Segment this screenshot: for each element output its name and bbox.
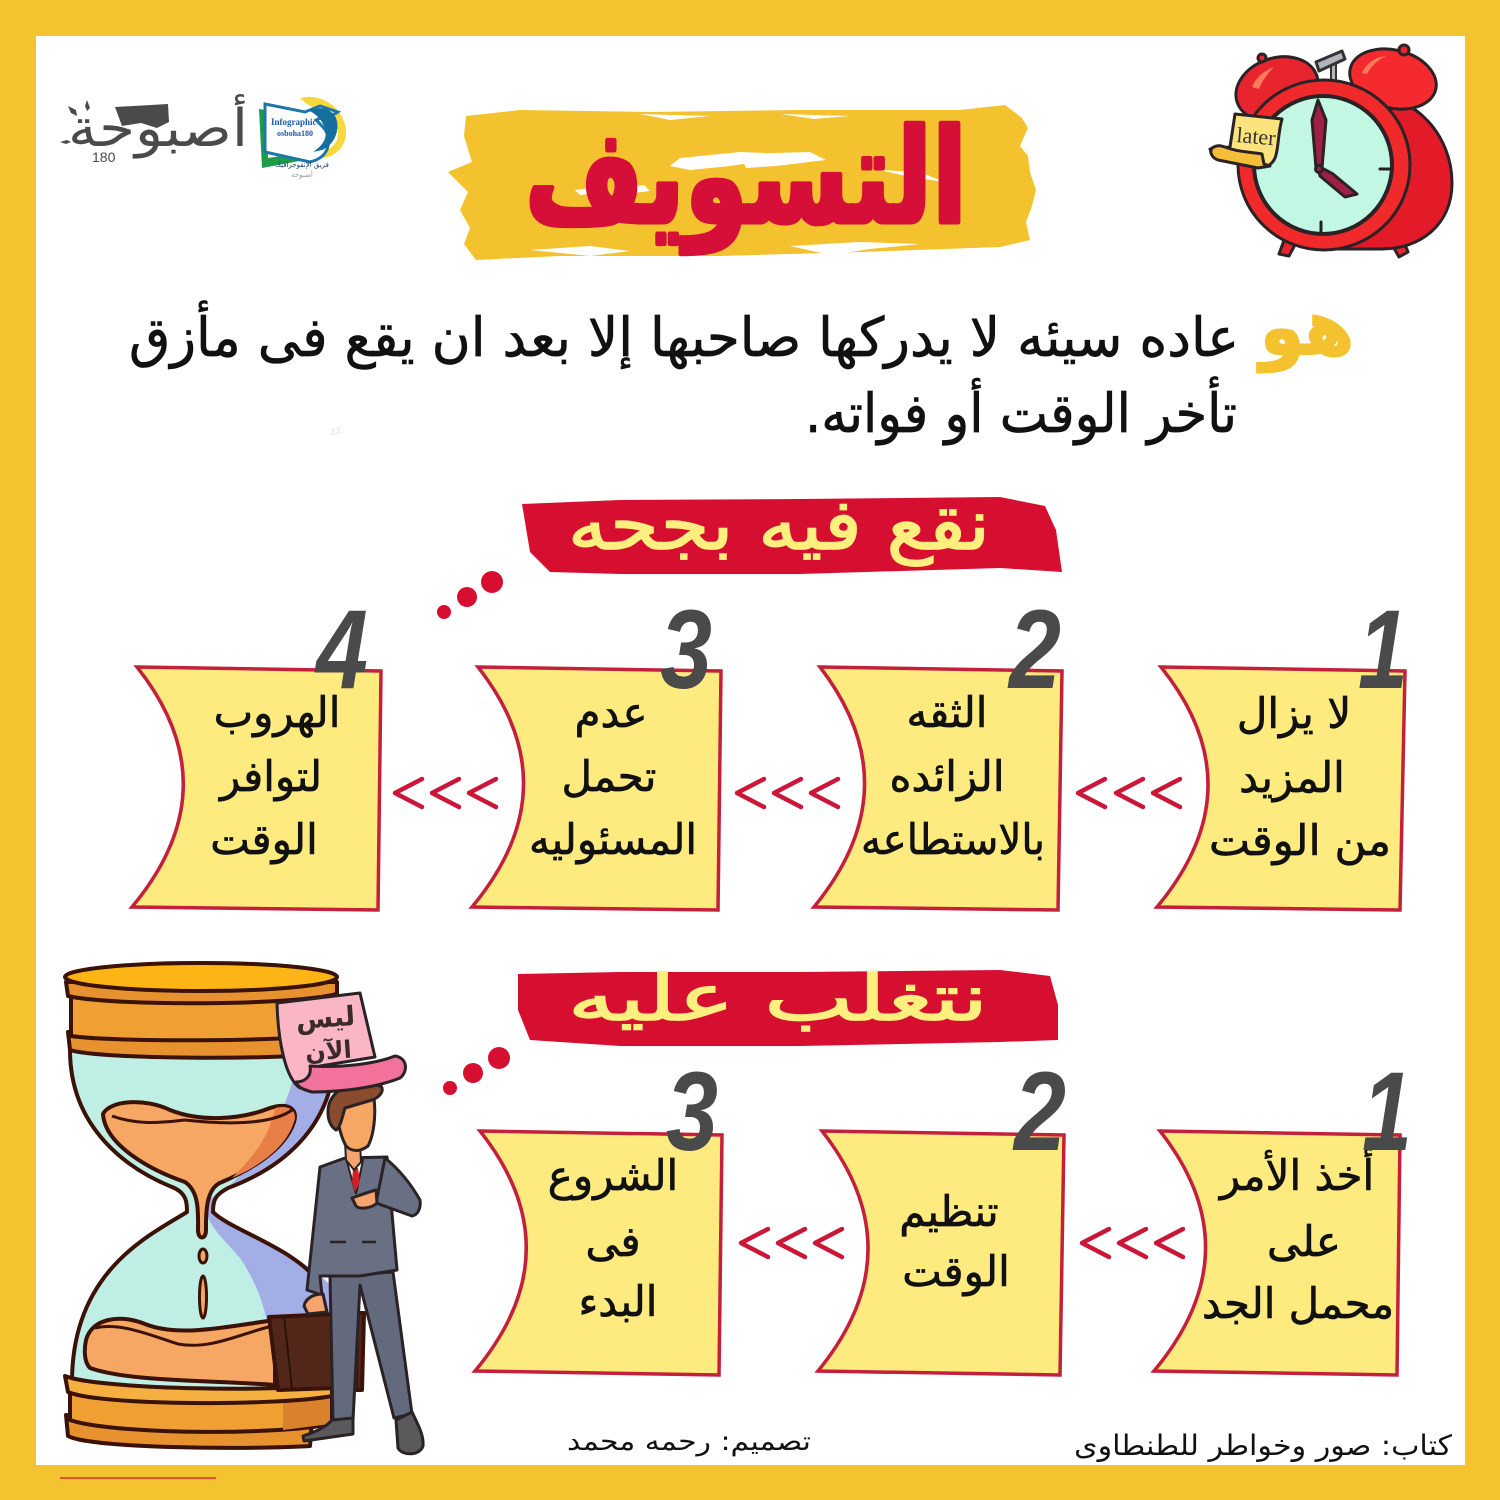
credit: designer: تصميم: رحمه محمد [567,1427,811,1457]
man shoes [303,1412,423,1454]
step 2 row 2: تنظيم [899,1187,999,1237]
intro text: highlighted word: هو [1256,283,1354,373]
glass outline [70,1050,335,1380]
hourglass top cap [65,963,337,1058]
arrow 2-3 row 1 [737,779,838,807]
briefcase [269,1313,364,1390]
step 3 row 1 [472,587,721,910]
clock red ring [1238,80,1410,250]
logo number: 180 [92,149,116,165]
step 2 row 1: الزائده [889,752,1005,801]
step 3 row 2: الشروع [548,1151,678,1200]
sticky note: later: later [1236,122,1277,150]
hourglass glass [70,1050,335,1395]
step 1 row 1: المزيد [1239,753,1345,802]
step 3 row 1: تحمل [562,752,656,801]
step 4 row 1 [132,587,381,910]
man legs [330,1272,412,1420]
arrow 2-3 row 2 [741,1229,842,1257]
arrow 1-2 row 1 [1078,779,1180,807]
logo wordmark: أصبوحة [68,94,248,159]
arrow 1-2 row 2 [1082,1229,1183,1257]
section heading 1: نقع فيه بجحه [568,484,990,566]
step 3 row 2: البدء [579,1277,657,1326]
step 1 row 1: لا يزال [1237,689,1351,738]
step 2 row 1 [814,587,1062,910]
team emblem: أصبوحة [291,170,313,179]
title: التسويف [525,101,967,254]
step 1 row 2: محمل الجد [1202,1279,1394,1328]
step 2 row 1: 2 [1007,587,1061,712]
credit: book source: كتاب: صور وخواطر للطنطاوى [1074,1429,1453,1462]
clock back body [1320,95,1452,249]
step 1 row 1: 1 [1358,587,1408,712]
clock right bell [1343,40,1443,118]
glass shadow [207,1050,335,1345]
intro text: line 1: عاده سيئه لا يدركها صاحبها إلا بعد ان يقع فى مأزق [129,300,1239,370]
banner paint scratches [530,114,944,256]
clock minute hand [1312,100,1326,168]
clock left bell [1227,47,1327,131]
sticky note: later [1210,114,1282,168]
falling drops [199,1249,207,1318]
step 3 row 1: 3 [660,587,712,712]
step 3 row 2: 3 [666,1049,718,1174]
section ribbon 1 [522,484,1062,574]
section heading 2: نتغلب عليه [568,962,988,1036]
step 1 row 2: على [1267,1217,1341,1266]
clock pin [1316,166,1322,172]
step 3 row 2: فى [585,1217,641,1266]
logo graduation cap [115,104,169,128]
man neck [345,1142,361,1170]
logo: osboha 180 [60,94,346,179]
step 2 row 2: الوقت [902,1247,1010,1296]
step 4 row 1: الوقت [210,815,318,864]
hourglass bottom base [65,1376,332,1448]
step 2 row 2: 2 [1012,1049,1066,1174]
clock hour hand [1318,166,1357,197]
step 2 row 2 [818,1049,1066,1375]
thin red line [60,1477,216,1479]
logo sun rays [60,100,90,144]
clock feet [1279,235,1408,257]
step 3 row 1: عدم [574,688,648,737]
man jacket [307,1157,420,1295]
step 1 row 1 [1157,587,1408,910]
step 4 row 1: لتوافر [218,752,322,801]
step 4 row 1: الهروب [214,688,340,738]
title banner: yellow brush [448,105,1036,260]
clock ticks [1321,169,1390,232]
intro text: line 2: تأخر الوقت أو فواته. [805,376,1237,445]
pink note [277,993,405,1092]
step 3 row 2 [475,1049,722,1375]
pink note: الآن [304,1035,353,1067]
step 3 row 1: المسئوليه [529,815,697,864]
step 1 row 2: 1 [1362,1049,1412,1174]
pink note: ليس [295,1001,356,1036]
step 1 row 1: من الوقت [1209,816,1391,865]
illustration: hourglass and man [65,963,423,1454]
dots 1 [437,571,503,619]
man shirt and tie [347,1160,363,1194]
man hand on briefcase [304,1294,327,1314]
step 1 row 2 [1154,1049,1412,1375]
arrow 3-4 row 1 [395,779,496,807]
dots 2 [443,1047,510,1095]
section ribbon 2 [518,962,1058,1046]
step 2 row 1: الثقه [907,688,987,737]
step 4 row 1: 4 [314,587,368,712]
team emblem: فريق الإنفوجرافيك [275,161,329,169]
team emblem: Infographic [271,117,317,127]
step 1 row 2: أخذ الأمر [1218,1148,1374,1200]
team emblem [259,97,346,179]
team emblem: osboha180 [277,129,313,138]
man head [328,1084,382,1150]
man hand at watch [352,1190,377,1208]
step 2 row 1: بالاستطاعه [861,815,1045,864]
clock hammer [1316,51,1345,82]
faint mark: zz [329,424,342,438]
icon: alarm clock [1210,40,1452,257]
top sand [103,1102,295,1238]
clock face [1254,96,1392,234]
bottom sand [85,1319,275,1385]
